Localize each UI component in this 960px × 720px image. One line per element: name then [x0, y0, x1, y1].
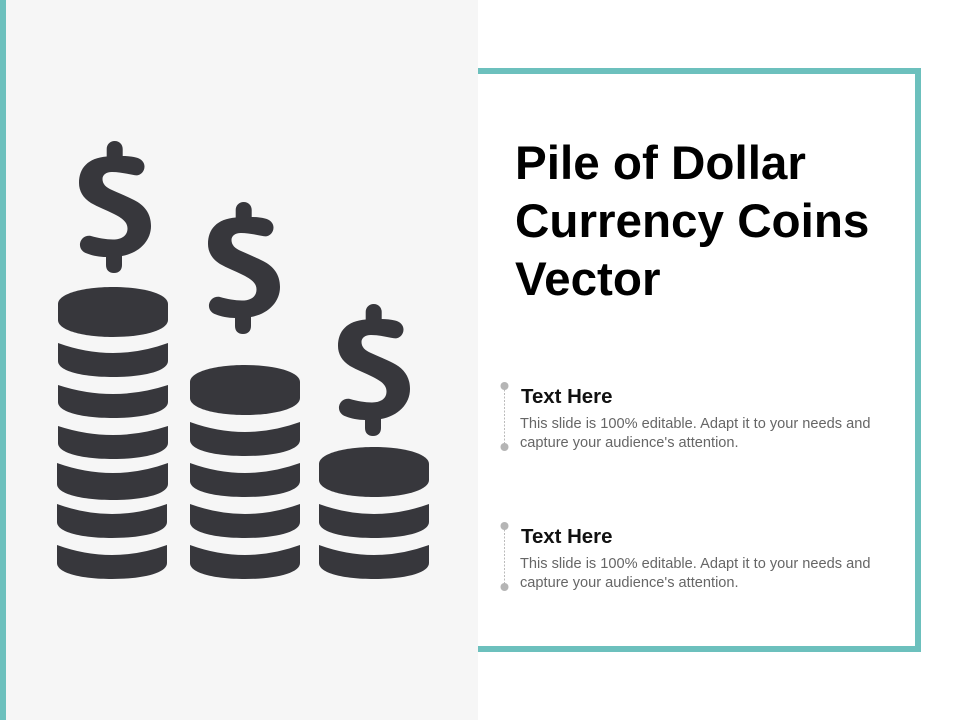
body 1 [520, 416, 870, 451]
body 2: capture your audience's attention. [520, 575, 739, 591]
title [515, 137, 869, 306]
left grey panel [0, 0, 478, 720]
title: Pile of Dollar [515, 137, 806, 190]
text block 1 [500, 382, 870, 451]
left teal stripe [0, 0, 6, 720]
body 2 [520, 556, 870, 591]
body 1: capture your audience's attention. [520, 435, 739, 451]
teal content frame [478, 68, 921, 652]
title: Vector [515, 253, 660, 306]
left dollar sign [79, 141, 151, 273]
title: Currency Coins [515, 195, 869, 248]
illustration: coin stacks with dollar signs [57, 141, 429, 579]
connector with dots 2 [500, 522, 508, 591]
middle coin stack [190, 365, 300, 579]
heading 2: Text Here [521, 526, 612, 548]
middle dollar sign [208, 202, 280, 334]
right coin stack [319, 447, 429, 579]
body 1: This slide is 100% editable. Adapt it to your needs and [520, 416, 870, 432]
text block 2 [500, 522, 870, 591]
heading 1: Text Here [521, 386, 612, 408]
body 2: This slide is 100% editable. Adapt it to your needs and [520, 556, 870, 572]
right dollar sign [338, 304, 410, 436]
left coin stack [57, 287, 168, 579]
connector with dots 1 [500, 382, 508, 451]
